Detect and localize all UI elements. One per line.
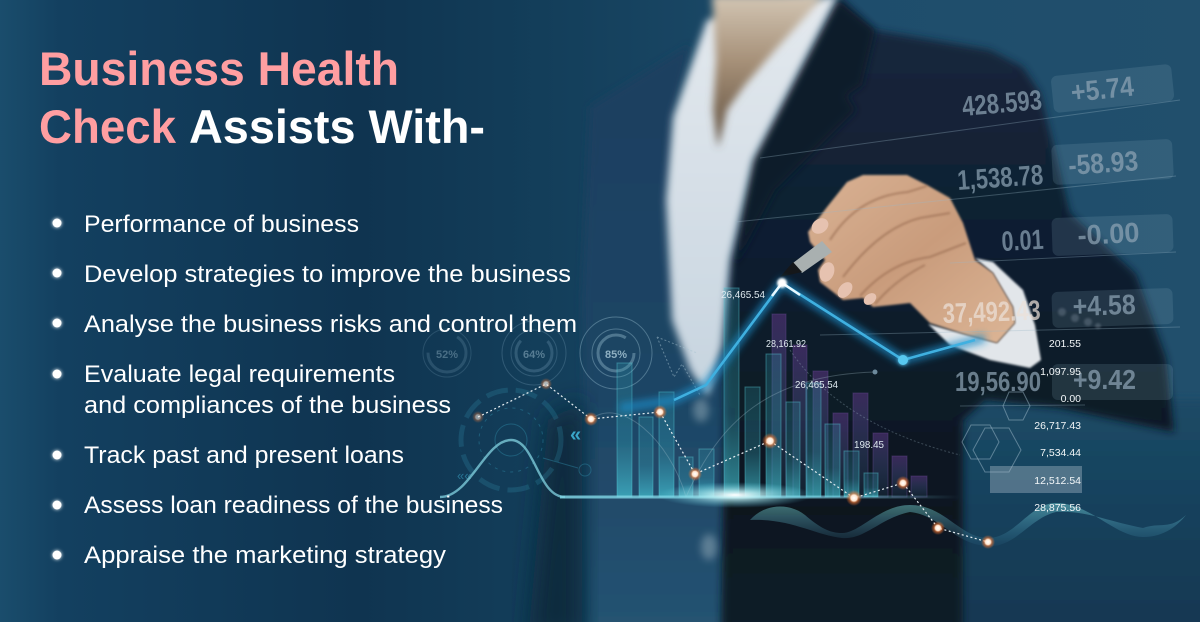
large numbers: 428.593	[961, 84, 1043, 122]
dark band left of jacket	[528, 400, 582, 622]
item: legal: and compliances of the business	[84, 392, 451, 419]
teal bars	[617, 288, 878, 497]
chart value labels: 28,161.92	[766, 338, 806, 350]
item: marketing: Appraise the marketing strategy	[84, 542, 446, 569]
large numbers: -0.00	[1077, 217, 1140, 251]
lapel	[735, 0, 875, 265]
highlighted value box	[990, 466, 1082, 493]
item: performance: Performance of business	[84, 211, 359, 238]
shirt	[666, 0, 838, 397]
large numbers: +5.74	[1069, 71, 1136, 108]
right value column: 201.55	[1049, 338, 1081, 350]
bullet markers	[52, 218, 62, 560]
purple bars	[772, 314, 927, 497]
title: Check	[39, 100, 177, 153]
guide lines	[735, 100, 1180, 406]
dial 52%: 52%	[436, 349, 458, 361]
chart value labels	[721, 289, 884, 451]
item: loans: Track past and present loans	[84, 442, 404, 469]
businessperson photo scene	[528, 0, 1200, 622]
neck	[712, 0, 825, 148]
hand	[808, 175, 1015, 343]
item: readiness: Assess loan readiness of the business	[84, 492, 503, 519]
radar graphic	[461, 390, 591, 490]
item: risks: Analyse the business risks and control them	[84, 311, 577, 338]
chevrons	[457, 424, 581, 483]
chart value labels: 198.45	[854, 439, 884, 451]
financial readout: large translucent figures	[735, 64, 1180, 406]
hexagons	[962, 392, 1030, 472]
dial 64%: 64%	[523, 349, 545, 361]
item: legal	[84, 361, 451, 419]
title	[39, 42, 485, 153]
chevrons: ««	[457, 468, 471, 483]
finger creases	[830, 186, 966, 304]
right value column: 0.00	[1061, 393, 1081, 405]
right value column	[1034, 338, 1081, 514]
jacket left side	[582, 45, 735, 622]
large numbers: 19,56.90	[955, 366, 1041, 397]
fingernails	[809, 215, 879, 307]
large numbers: 0.01	[1001, 224, 1044, 257]
shirt cuff	[928, 258, 1041, 368]
large numbers: +9.42	[1073, 364, 1136, 395]
dashed arrow outline	[657, 337, 700, 395]
large numbers: 37,492.43	[942, 295, 1041, 329]
right value column: 12,512.54	[1034, 475, 1081, 487]
chart value labels: 26,465.54	[795, 379, 838, 391]
sleeve buttons	[1058, 308, 1101, 329]
bullet list	[52, 211, 577, 569]
item: strategies: Develop strategies to improve the business	[84, 261, 571, 288]
large numbers: 1,538.78	[956, 159, 1044, 196]
glowing trend line	[620, 278, 985, 408]
blurred jacket buttons	[693, 398, 717, 560]
item: legal: Evaluate legal requirements	[84, 361, 395, 388]
large numbers	[942, 71, 1140, 397]
nodes	[472, 378, 995, 549]
right value column: 1,097.95	[1040, 366, 1081, 378]
right value column: 26,717.43	[1034, 420, 1081, 432]
dial 64%	[502, 321, 566, 385]
chart value labels: 26,465.54	[721, 289, 765, 301]
faint arcs	[590, 350, 960, 497]
dial 85%	[580, 317, 652, 389]
dial 52%	[423, 329, 471, 377]
dial 85%: 85%	[605, 349, 627, 361]
lower right background	[955, 400, 1200, 622]
pen	[780, 241, 832, 277]
large numbers: +4.58	[1072, 289, 1136, 322]
bar chart	[617, 288, 927, 497]
wave line and baseline	[440, 440, 1186, 546]
right value column: 7,534.44	[1040, 447, 1081, 459]
progress dials	[423, 317, 652, 389]
dotted data line with nodes	[472, 378, 995, 549]
large numbers: -58.93	[1067, 145, 1139, 181]
title: Assists With-	[189, 100, 485, 153]
rows of translucent boxes	[1050, 64, 1175, 400]
jacket dark torso and right shoulder	[721, 0, 1174, 622]
chevrons: «	[570, 424, 581, 446]
title: Business Health	[39, 42, 399, 95]
baseline flare	[657, 482, 813, 508]
right value column: 28,875.56	[1034, 502, 1081, 514]
